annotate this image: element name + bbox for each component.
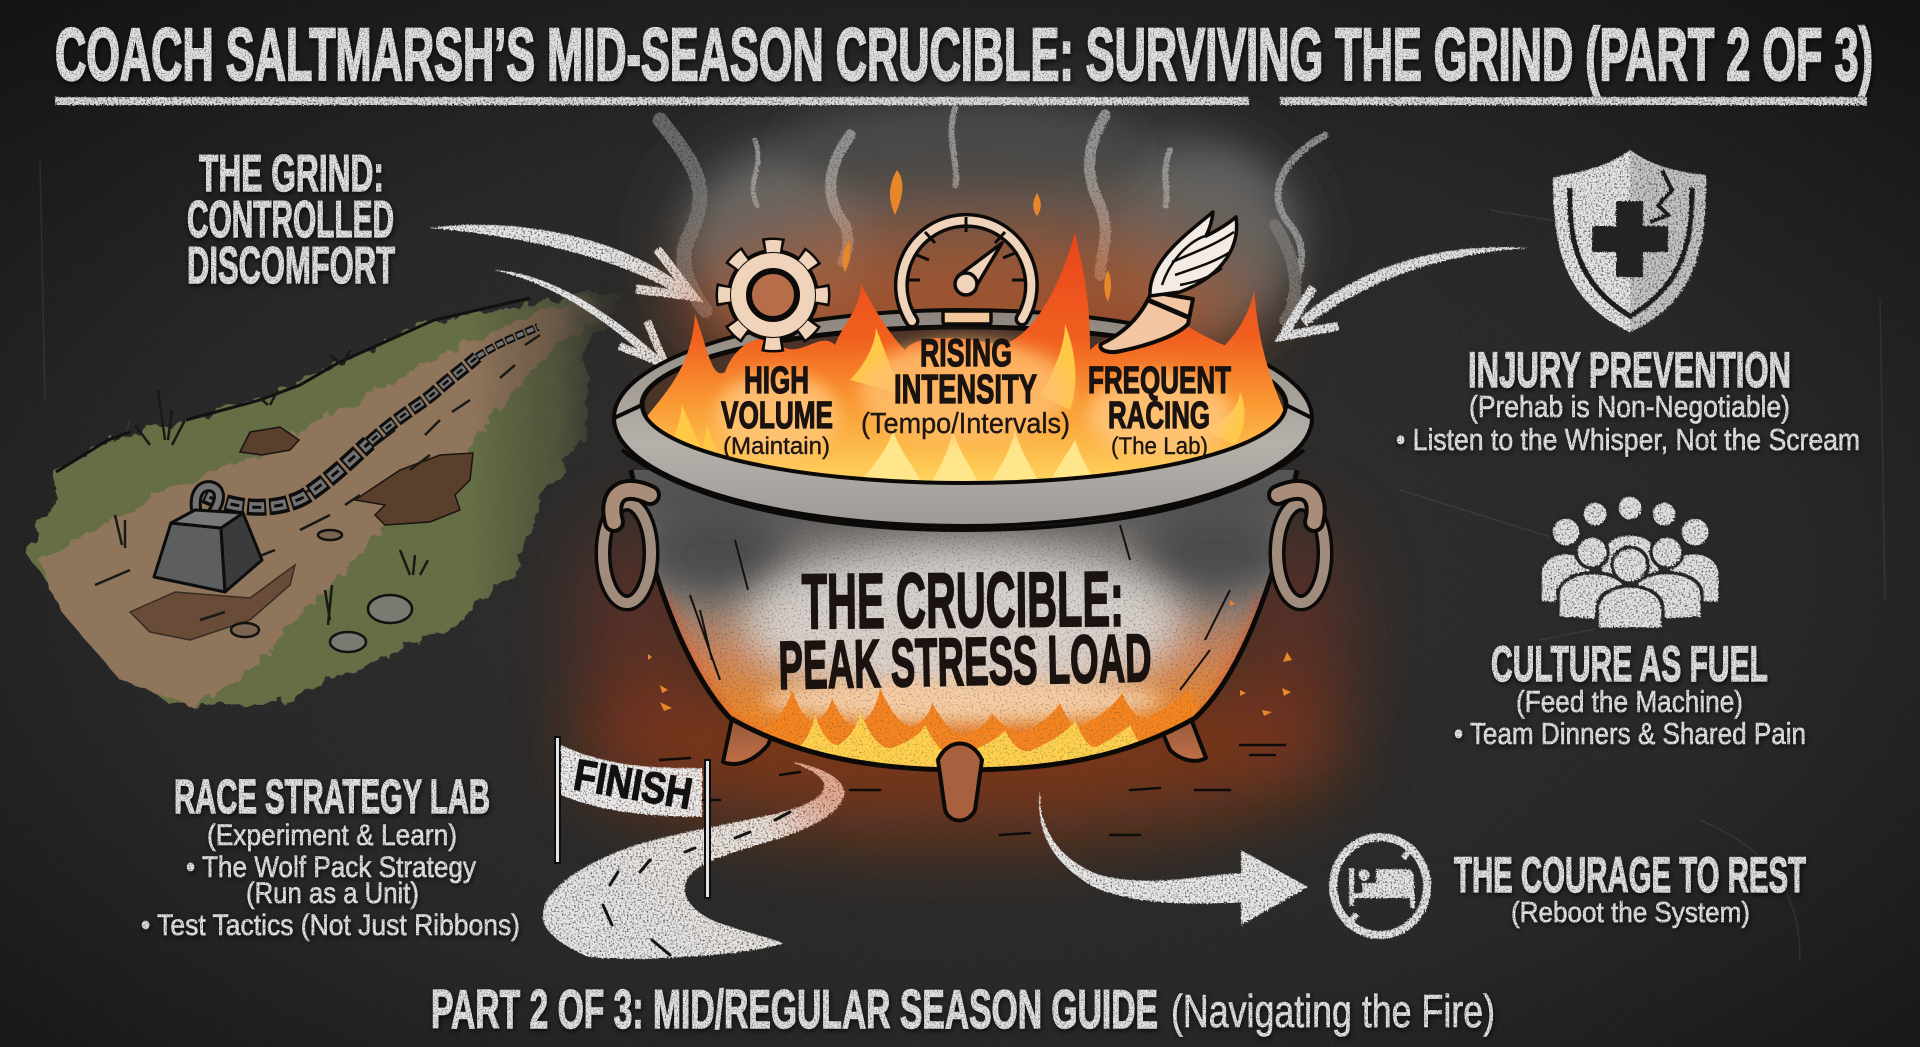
chain — [196, 327, 538, 518]
cauldron centre foot — [938, 744, 982, 820]
icon: winged shoe (frequent racing) — [1100, 212, 1237, 352]
panel: the grind heading: CONTROLLED — [187, 191, 394, 249]
arrow: grind to crucible, upper — [429, 225, 693, 298]
panel: the grind heading: DISCOMFORT — [187, 237, 395, 295]
road centre dashes — [603, 812, 790, 955]
mud patches — [130, 427, 473, 640]
panel: the grind heading: THE GRIND: — [199, 145, 384, 203]
panel: the courage to rest text: (Reboot the System) — [1511, 897, 1750, 929]
dirt path — [39, 297, 610, 705]
finish poles — [555, 737, 710, 898]
panel: race strategy lab text: • Test Tactics (Not Just Ribbons) — [141, 909, 520, 942]
label: frequent racing: (The Lab) — [1111, 433, 1208, 460]
panel: culture as fuel text — [1454, 636, 1806, 751]
label: frequent racing: FREQUENT — [1088, 360, 1231, 402]
panel: injury prevention text — [1396, 342, 1860, 457]
rocks — [231, 530, 412, 652]
panel: race strategy lab text: (Run as a Unit) — [246, 877, 419, 910]
label: rising intensity — [861, 332, 1070, 440]
crucible glow on ground — [580, 225, 1350, 835]
label: rising intensity: (Tempo/Intervals) — [861, 408, 1070, 440]
trail ruts and grass tufts — [95, 335, 540, 625]
crucible — [603, 170, 1325, 820]
illustration: muddy trail with weight and chain — [26, 290, 620, 705]
panel: injury prevention text: (Prehab is Non-Negotiable) — [1469, 389, 1790, 424]
panel: race strategy lab text — [141, 771, 520, 942]
label: the crucible peak stress load: THE CRUCIBLE: — [801, 555, 1124, 645]
icon: cracked shield with cross — [1553, 150, 1706, 332]
sparks above the flames — [648, 170, 1292, 716]
road — [543, 762, 844, 959]
label: high volume — [721, 360, 833, 460]
inner wall — [642, 327, 1286, 483]
icon: speedometer (rising intensity) — [901, 217, 1031, 324]
finish label: FINISH — [570, 751, 696, 819]
label: frequent racing — [1088, 360, 1231, 460]
back rim — [614, 310, 1312, 526]
label: high volume: (Maintain) — [723, 433, 830, 460]
flames — [644, 232, 1287, 486]
label: the crucible peak stress load: PEAK STRESS LOAD — [778, 620, 1152, 704]
label: the crucible peak stress load — [778, 555, 1152, 704]
panel: the courage to rest text — [1454, 847, 1806, 929]
grass verge — [26, 290, 620, 705]
cauldron body — [620, 470, 1310, 778]
arrow: injury prevention to crucible — [1283, 247, 1529, 336]
panel: race strategy lab text: RACE STRATEGY LAB — [174, 771, 490, 824]
arrow: crucible to rest — [1039, 788, 1308, 925]
right handle ring — [1277, 490, 1325, 603]
icon: gear (high volume) — [724, 246, 822, 344]
panel: race strategy lab text: • The Wolf Pack Strategy — [186, 851, 476, 884]
footer: series label: PART 2 OF 3: MID/REGULAR SEASON GUIDE — [431, 978, 1158, 1040]
label: high volume: HIGH — [744, 360, 809, 402]
trail top outline — [56, 298, 530, 472]
smoke rising from the crucible — [660, 108, 1325, 350]
panel: the grind heading — [187, 145, 395, 295]
finish banner — [561, 745, 702, 817]
iron weight — [154, 510, 262, 592]
panel: culture as fuel text: • Team Dinners & Shared Pain — [1454, 716, 1806, 751]
front rim — [614, 405, 1312, 526]
left handle ring — [603, 490, 651, 603]
illustration: winding road to finish — [543, 737, 844, 959]
cauldron side feet — [723, 690, 1206, 764]
label: rising intensity: INTENSITY — [894, 366, 1037, 412]
title underline — [55, 97, 1867, 105]
panel: culture as fuel text: (Feed the Machine) — [1516, 684, 1743, 719]
label: frequent racing: RACING — [1108, 395, 1210, 437]
footer: series label: (Navigating the Fire) — [1171, 985, 1495, 1037]
panel: race strategy lab text: (Experiment & Learn) — [207, 819, 457, 852]
rim lower shadow — [622, 450, 1304, 530]
icon: bed in a circle (rest) — [1333, 837, 1427, 935]
arrow: grind to crucible, lower — [494, 270, 665, 364]
label: rising intensity: RISING — [920, 332, 1012, 375]
label: high volume: VOLUME — [721, 395, 833, 437]
icon: team of people — [1540, 495, 1720, 629]
